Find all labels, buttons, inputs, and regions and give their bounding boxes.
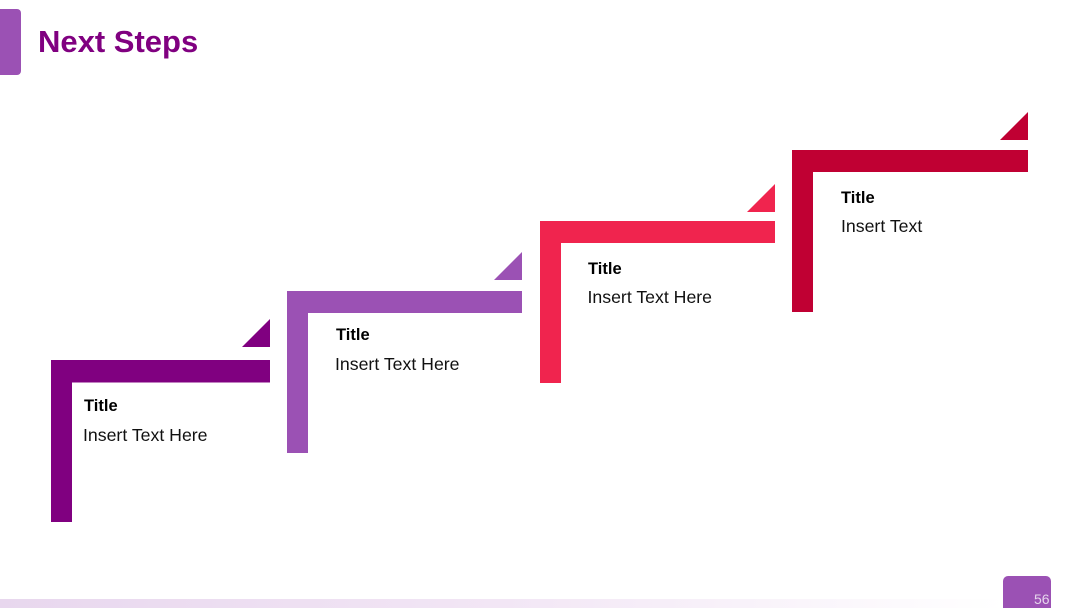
step 2 heading: Title [336, 326, 370, 344]
step 4 bracket [792, 150, 1028, 312]
step 1 triangle [242, 319, 270, 347]
step 1 text: Insert Text Here [83, 425, 208, 445]
page number tab [1003, 576, 1051, 608]
step 2 text: Insert Text Here [335, 354, 460, 374]
step 3 [540, 184, 775, 383]
step 2 triangle [494, 252, 522, 280]
step 4 triangle [1000, 112, 1028, 140]
step 2 bracket [287, 291, 522, 453]
page number: 56 [1034, 591, 1050, 607]
step 2 [287, 252, 522, 453]
step 4 text: Insert Text [841, 216, 922, 236]
title: Next Steps [38, 24, 198, 59]
header accent tab [0, 9, 21, 75]
step 3 bracket [540, 221, 775, 383]
step 3 triangle [747, 184, 775, 212]
step 4 [792, 112, 1028, 312]
step 1 bracket [51, 360, 270, 522]
footer gradient band [0, 599, 1004, 608]
step 1 heading: Title [84, 397, 118, 415]
step 3 heading: Title [588, 260, 622, 278]
step 3 text: Insert Text Here [588, 287, 712, 307]
step 4 heading: Title [841, 189, 875, 207]
step 1 [51, 319, 270, 522]
